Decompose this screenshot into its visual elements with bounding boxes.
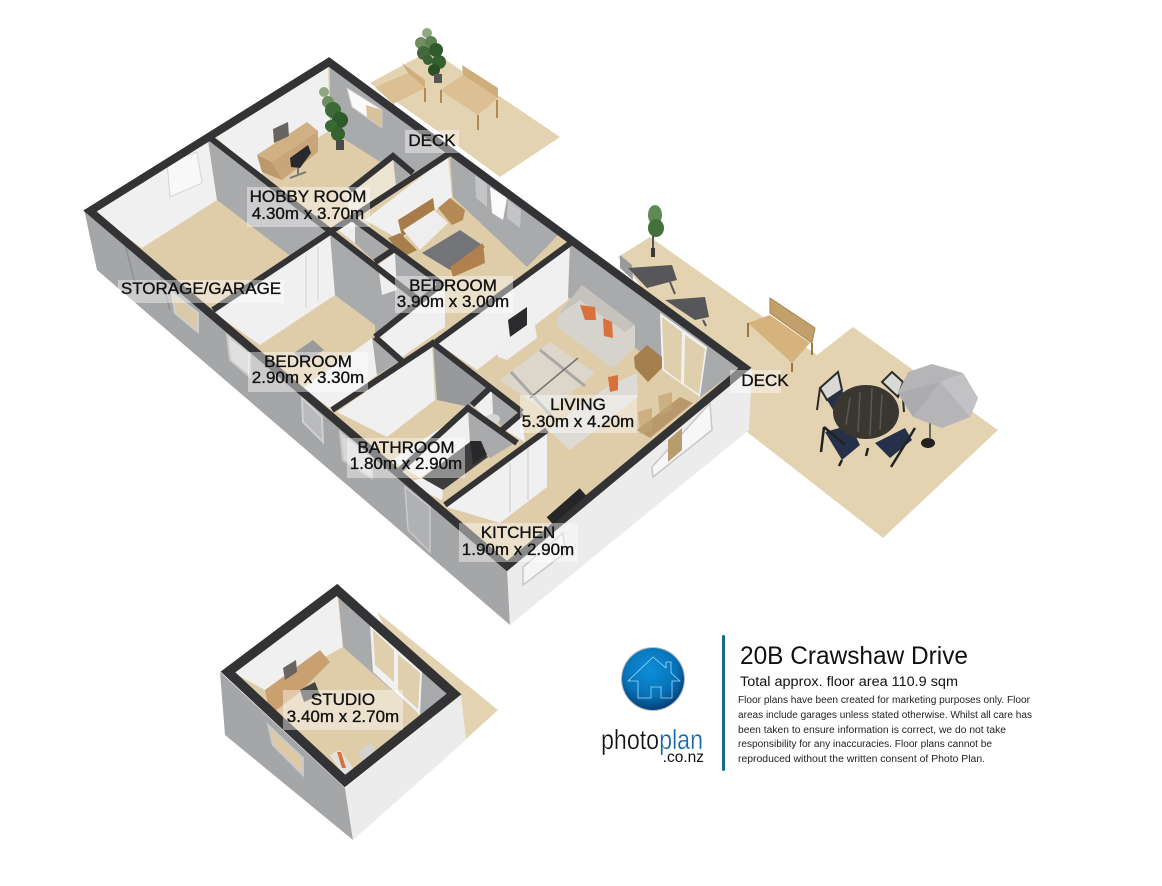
label studio [283, 690, 403, 730]
desk [257, 122, 318, 162]
label living: 5.30m x 4.20m [522, 412, 634, 431]
bed [398, 198, 485, 277]
TV [508, 307, 527, 337]
wall tops [90, 62, 745, 566]
floor area: Total approx. floor area 110.9 sqm [740, 674, 958, 689]
studio wall tops [228, 590, 454, 781]
sofa [558, 285, 635, 368]
umbrella [898, 364, 978, 448]
label kitchen [459, 523, 578, 562]
label bedroom right: BEDROOM [409, 276, 497, 295]
logo wordmark: photoplan [601, 724, 703, 755]
logo domain: .co.nz [663, 749, 704, 766]
bed [294, 340, 324, 362]
plant [415, 28, 446, 83]
studio walls [232, 592, 450, 715]
rug [500, 342, 595, 420]
disclaimer text: reproduced without the written consent of Photo Plan. [738, 754, 985, 765]
label kitchen: KITCHEN [481, 523, 555, 542]
garden bench [748, 298, 815, 372]
label living: LIVING [550, 395, 606, 414]
studio building [220, 588, 498, 840]
bedroom left walls [213, 232, 420, 410]
hallway closets [337, 219, 443, 301]
bathroom [337, 343, 525, 500]
disclaimer text: been taken to ensure information is correct, we do not take [738, 725, 1006, 736]
studio window [268, 725, 303, 775]
storage room walls [92, 140, 330, 258]
main house [84, 60, 752, 625]
armchair sofa [548, 373, 638, 450]
plant on deck [648, 205, 664, 257]
studio exterior [220, 672, 353, 840]
lower deck [618, 205, 998, 538]
top deck [370, 28, 560, 177]
label hobby room: HOBBY ROOM [250, 187, 366, 206]
closet [345, 158, 396, 215]
label bathroom: BATHROOM [358, 438, 454, 457]
room labels [118, 130, 789, 730]
exterior grey wall [84, 209, 510, 625]
living and kitchen walls [436, 242, 740, 523]
studio desk [265, 650, 330, 715]
label bedroom right [395, 276, 513, 313]
window [302, 398, 323, 442]
shower tray [422, 442, 488, 490]
TV stand [497, 325, 537, 360]
label bathroom: 1.80m x 2.90m [350, 454, 462, 473]
studio deck [377, 612, 498, 740]
divider bar [722, 635, 725, 771]
window [340, 432, 372, 478]
label bedroom left: 2.90m x 3.30m [252, 368, 364, 387]
window and curtains [475, 175, 521, 228]
disclaimer text: Floor plans have been created for marketing purposes only. Floor [738, 695, 1031, 706]
kitchen wall [445, 431, 547, 523]
lounge chair 2 [665, 297, 709, 326]
bedroom right [337, 153, 560, 301]
disclaimer text: areas include garages unless stated otherwise. Whilst all care has [738, 710, 1032, 721]
window [523, 533, 565, 585]
window [227, 335, 250, 377]
label hobby room: 4.30m x 3.70m [252, 204, 364, 223]
label bedroom left: BEDROOM [264, 352, 352, 371]
window [172, 293, 198, 332]
nightstands [438, 198, 465, 225]
logo: Photo Plan [601, 647, 704, 766]
disclaimer text [738, 695, 1032, 765]
label studio: 3.40m x 2.70m [287, 707, 399, 726]
label storage: STORAGE/GARAGE [121, 279, 281, 298]
door [405, 487, 430, 552]
bench right [440, 65, 498, 130]
label bedroom right: 3.90m x 3.00m [397, 292, 509, 311]
icon: house [628, 657, 680, 698]
office chair [290, 145, 311, 178]
floor base [90, 62, 745, 566]
label deck right: DECK [741, 371, 789, 390]
label hobby room [247, 187, 370, 227]
studio sofa [330, 743, 379, 777]
studio floor [227, 588, 456, 783]
toilet room [473, 390, 525, 442]
sliding door [660, 313, 707, 397]
label studio: STUDIO [311, 690, 375, 709]
corridor wall [375, 284, 445, 357]
window [347, 88, 382, 128]
label deck top: DECK [408, 131, 456, 150]
label deck right [730, 370, 789, 393]
lounge chair 1 [620, 255, 677, 294]
hobby room [213, 60, 450, 215]
bench left [375, 63, 425, 113]
label bathroom [347, 438, 465, 478]
disclaimer text: responsibility for any inaccuracies. Floor plans cannot be [738, 739, 992, 750]
dining table [637, 392, 693, 438]
window [652, 403, 712, 477]
dining set [817, 372, 915, 467]
monitor [273, 122, 289, 143]
label bedroom left [248, 352, 368, 392]
exterior white wall [507, 368, 752, 625]
label living [520, 395, 637, 433]
title: 20B Crawshaw Drive [740, 642, 968, 670]
side table [634, 345, 662, 382]
plant [319, 87, 348, 150]
label kitchen: 1.90m x 2.90m [462, 540, 574, 559]
